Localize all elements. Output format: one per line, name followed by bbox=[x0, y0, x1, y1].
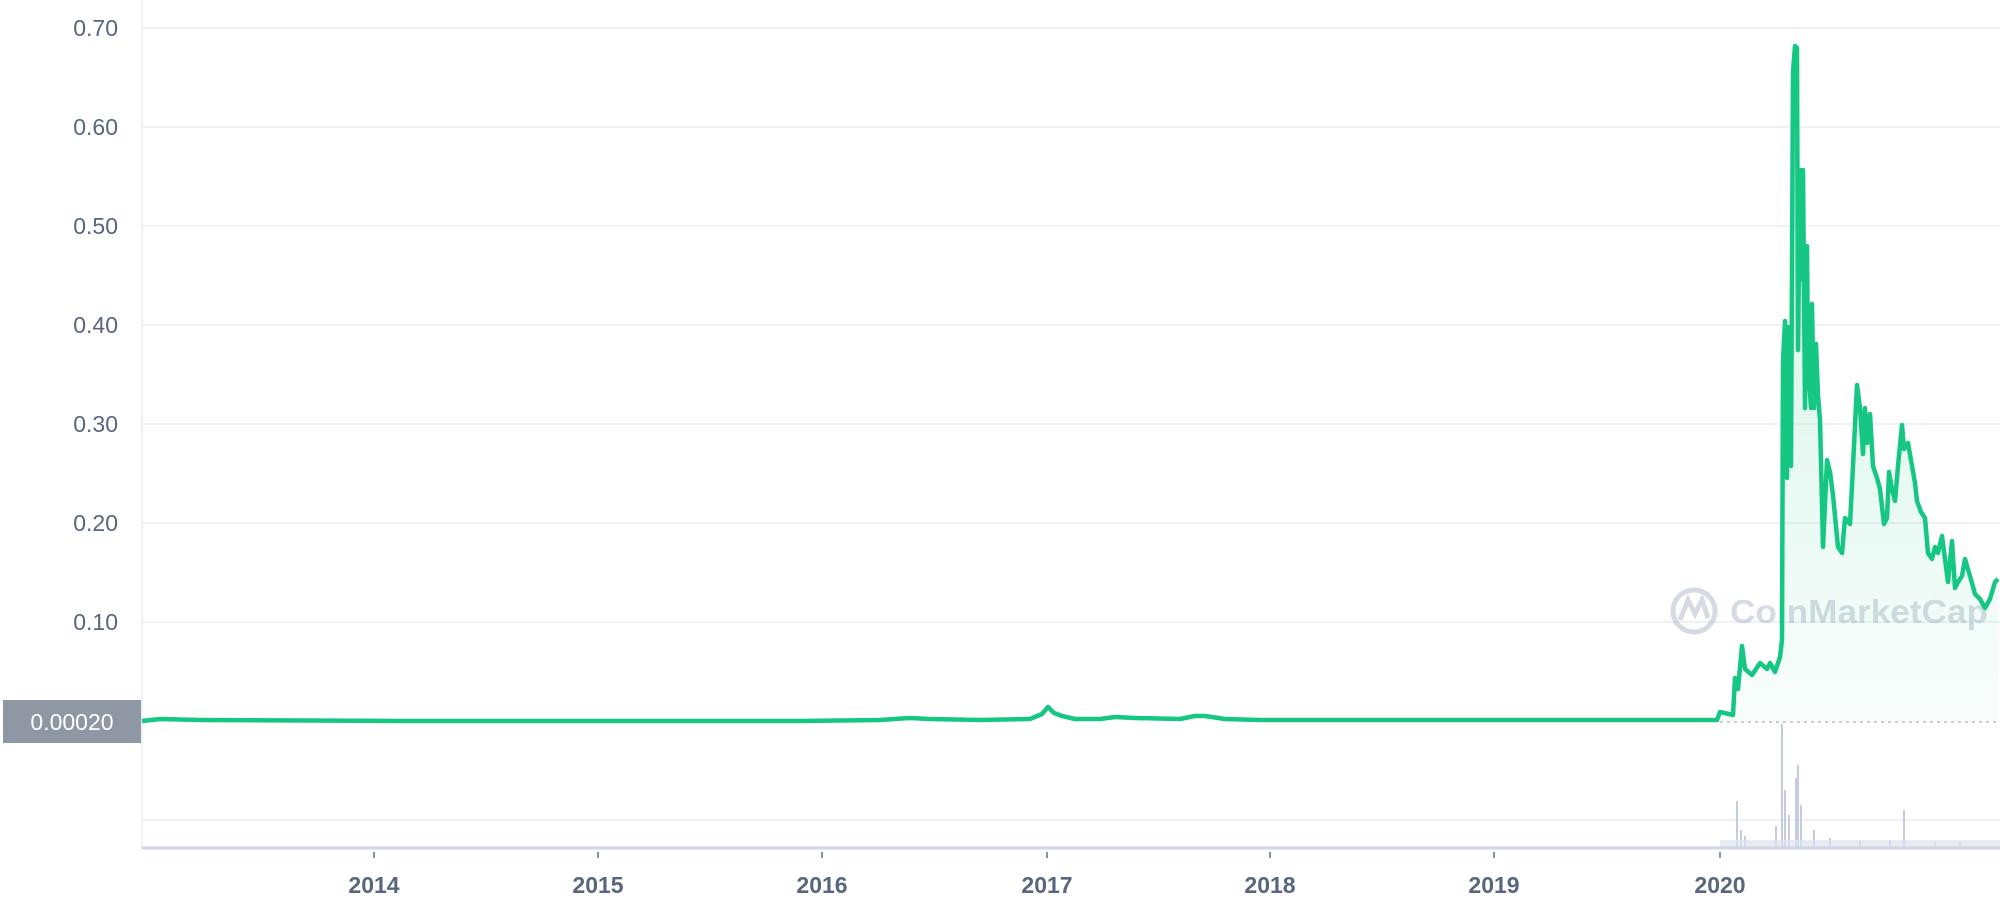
x axis ticks and year labels: 2017 bbox=[1021, 872, 1073, 898]
x axis ticks and year labels: 2015 bbox=[572, 872, 624, 898]
price line bbox=[142, 46, 1998, 721]
y axis labels: 0.30 bbox=[73, 411, 118, 437]
baseline dotted line bbox=[1720, 721, 2000, 723]
x axis ticks and year labels: 2019 bbox=[1468, 872, 1520, 898]
x axis ticks and year labels: 2018 bbox=[1244, 872, 1296, 898]
y axis labels: 0.20 bbox=[73, 510, 118, 536]
current price label: 0.00020 bbox=[30, 709, 114, 735]
watermark: CoinMarketCap bbox=[1673, 590, 1988, 632]
current price label bbox=[3, 700, 141, 743]
x axis ticks and year labels: 2016 bbox=[796, 872, 848, 898]
y axis labels bbox=[73, 15, 118, 635]
y axis labels: 0.10 bbox=[73, 609, 118, 635]
y axis labels: 0.50 bbox=[73, 213, 118, 239]
y axis labels: 0.70 bbox=[73, 15, 118, 41]
x axis line bbox=[142, 846, 2000, 850]
x axis ticks and year labels bbox=[348, 852, 1746, 898]
y axis labels: 0.60 bbox=[73, 114, 118, 140]
x axis ticks and year labels: 2020 bbox=[1694, 872, 1746, 898]
watermark: CoinMarketCap: CoinMarketCap bbox=[1730, 593, 1988, 630]
area fill under spike bbox=[1720, 46, 1998, 721]
y axis labels: 0.40 bbox=[73, 312, 118, 338]
volume bars bbox=[1737, 724, 1960, 848]
x axis ticks and year labels: 2014 bbox=[348, 872, 400, 898]
